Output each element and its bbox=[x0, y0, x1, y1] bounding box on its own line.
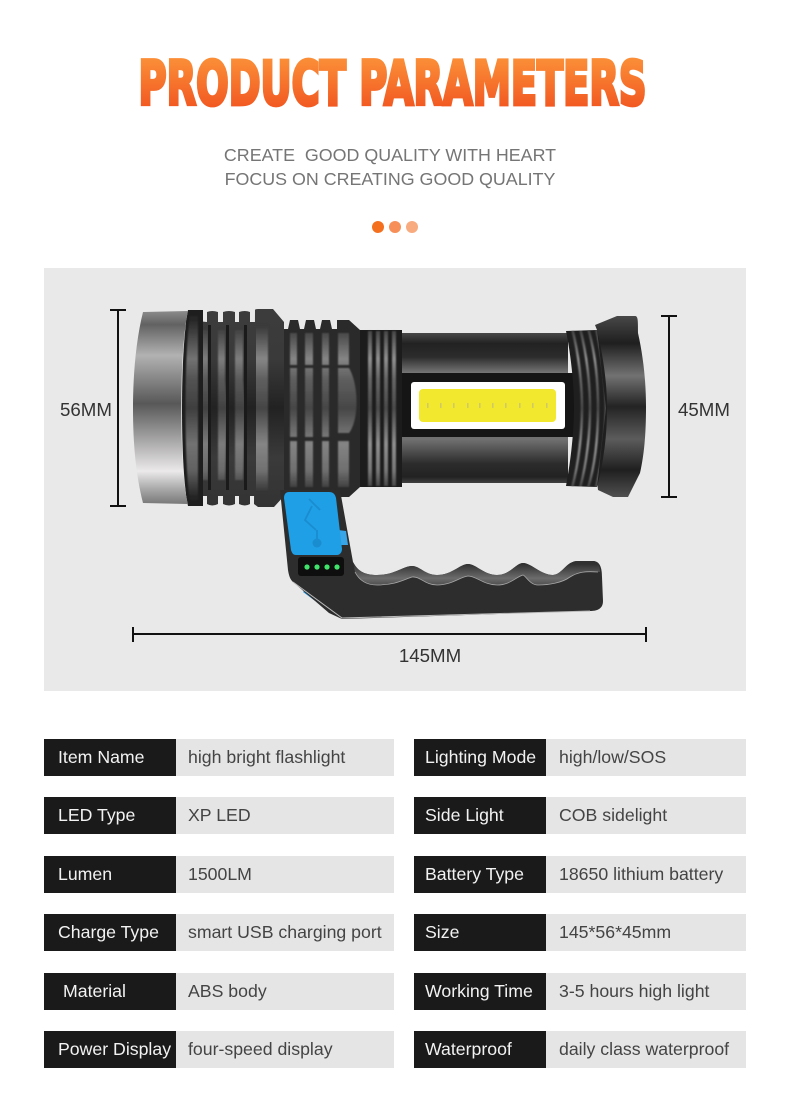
spec: Material bbox=[44, 973, 394, 1010]
spec: Side Light bbox=[414, 797, 746, 834]
spec: Working Time: 3-5 hours high light bbox=[559, 981, 709, 1001]
spec: Size: Size bbox=[425, 922, 459, 942]
spec: Working Time bbox=[414, 973, 746, 1010]
spec: Lighting Mode: Lighting Mode bbox=[425, 747, 536, 767]
spec: Charge Type bbox=[44, 914, 394, 951]
neck threads bbox=[360, 330, 402, 487]
spec: Lighting Mode bbox=[414, 739, 746, 776]
spec: Battery Type: 18650 lithium battery bbox=[559, 864, 723, 884]
spec: Charge Type: smart USB charging port bbox=[188, 922, 382, 942]
spec: Side Light: Side Light bbox=[425, 805, 504, 825]
spec: Item Name: Item Name bbox=[58, 747, 144, 767]
main tube bbox=[400, 333, 568, 483]
tail cap bbox=[595, 316, 646, 497]
battery indicator bbox=[298, 557, 344, 576]
spec: Power Display bbox=[44, 1031, 394, 1068]
spec: Size: 145*56*45mm bbox=[559, 922, 671, 942]
tail threads bbox=[566, 328, 607, 488]
spec: Lumen: Lumen bbox=[58, 864, 112, 884]
spec: LED Type: XP LED bbox=[188, 805, 251, 825]
front ring bbox=[182, 310, 203, 506]
spec: Waterproof: daily class waterproof bbox=[559, 1039, 729, 1059]
head fins bbox=[186, 311, 256, 506]
flashlight bbox=[133, 309, 646, 619]
spec: Battery Type: Battery Type bbox=[425, 864, 524, 884]
usb cover bbox=[284, 492, 348, 555]
spec: LED Type bbox=[44, 797, 394, 834]
spec: Material: Material bbox=[63, 981, 126, 1001]
spec: Power Display: four-speed display bbox=[188, 1039, 333, 1059]
head collar bbox=[254, 309, 284, 507]
dimension: 145MM bbox=[133, 627, 646, 666]
spec: LED Type: LED Type bbox=[58, 805, 135, 825]
spec: Working Time: Working Time bbox=[425, 981, 533, 1001]
spec: Item Name: high bright flashlight bbox=[188, 747, 345, 767]
spec: Size bbox=[414, 914, 746, 951]
dimension: 145MM: 145MM bbox=[399, 645, 461, 666]
panel background bbox=[44, 268, 746, 691]
decorative dots bbox=[372, 221, 418, 233]
dimension: 56MM bbox=[60, 310, 126, 506]
rear finned section bbox=[283, 320, 360, 497]
spec: Material: ABS body bbox=[188, 981, 267, 1001]
spec: Side Light: COB sidelight bbox=[559, 805, 667, 825]
spec: Item Name bbox=[44, 739, 394, 776]
dimension: 45MM: 45MM bbox=[678, 399, 730, 420]
handle bbox=[280, 490, 603, 619]
spec: Battery Type bbox=[414, 856, 746, 893]
spec: Lumen bbox=[44, 856, 394, 893]
spec: Lighting Mode: high/low/SOS bbox=[559, 747, 666, 767]
spec: Waterproof: Waterproof bbox=[425, 1039, 512, 1059]
subtitle line 1: CREATE GOOD QUALITY WITH HEART bbox=[224, 145, 556, 165]
spec: Lumen: 1500LM bbox=[188, 864, 252, 884]
spec: Charge Type: Charge Type bbox=[58, 922, 159, 942]
spec: Power Display: Power Display bbox=[58, 1039, 171, 1059]
dimension: 45MM bbox=[661, 316, 730, 497]
spec: Waterproof bbox=[414, 1031, 746, 1068]
silver bezel bbox=[133, 311, 188, 504]
subtitle line 2: FOCUS ON CREATING GOOD QUALITY bbox=[225, 169, 555, 189]
cob light bbox=[411, 382, 565, 429]
dimension: 56MM: 56MM bbox=[60, 399, 112, 420]
panel: flashlight dimensions bbox=[44, 268, 746, 691]
